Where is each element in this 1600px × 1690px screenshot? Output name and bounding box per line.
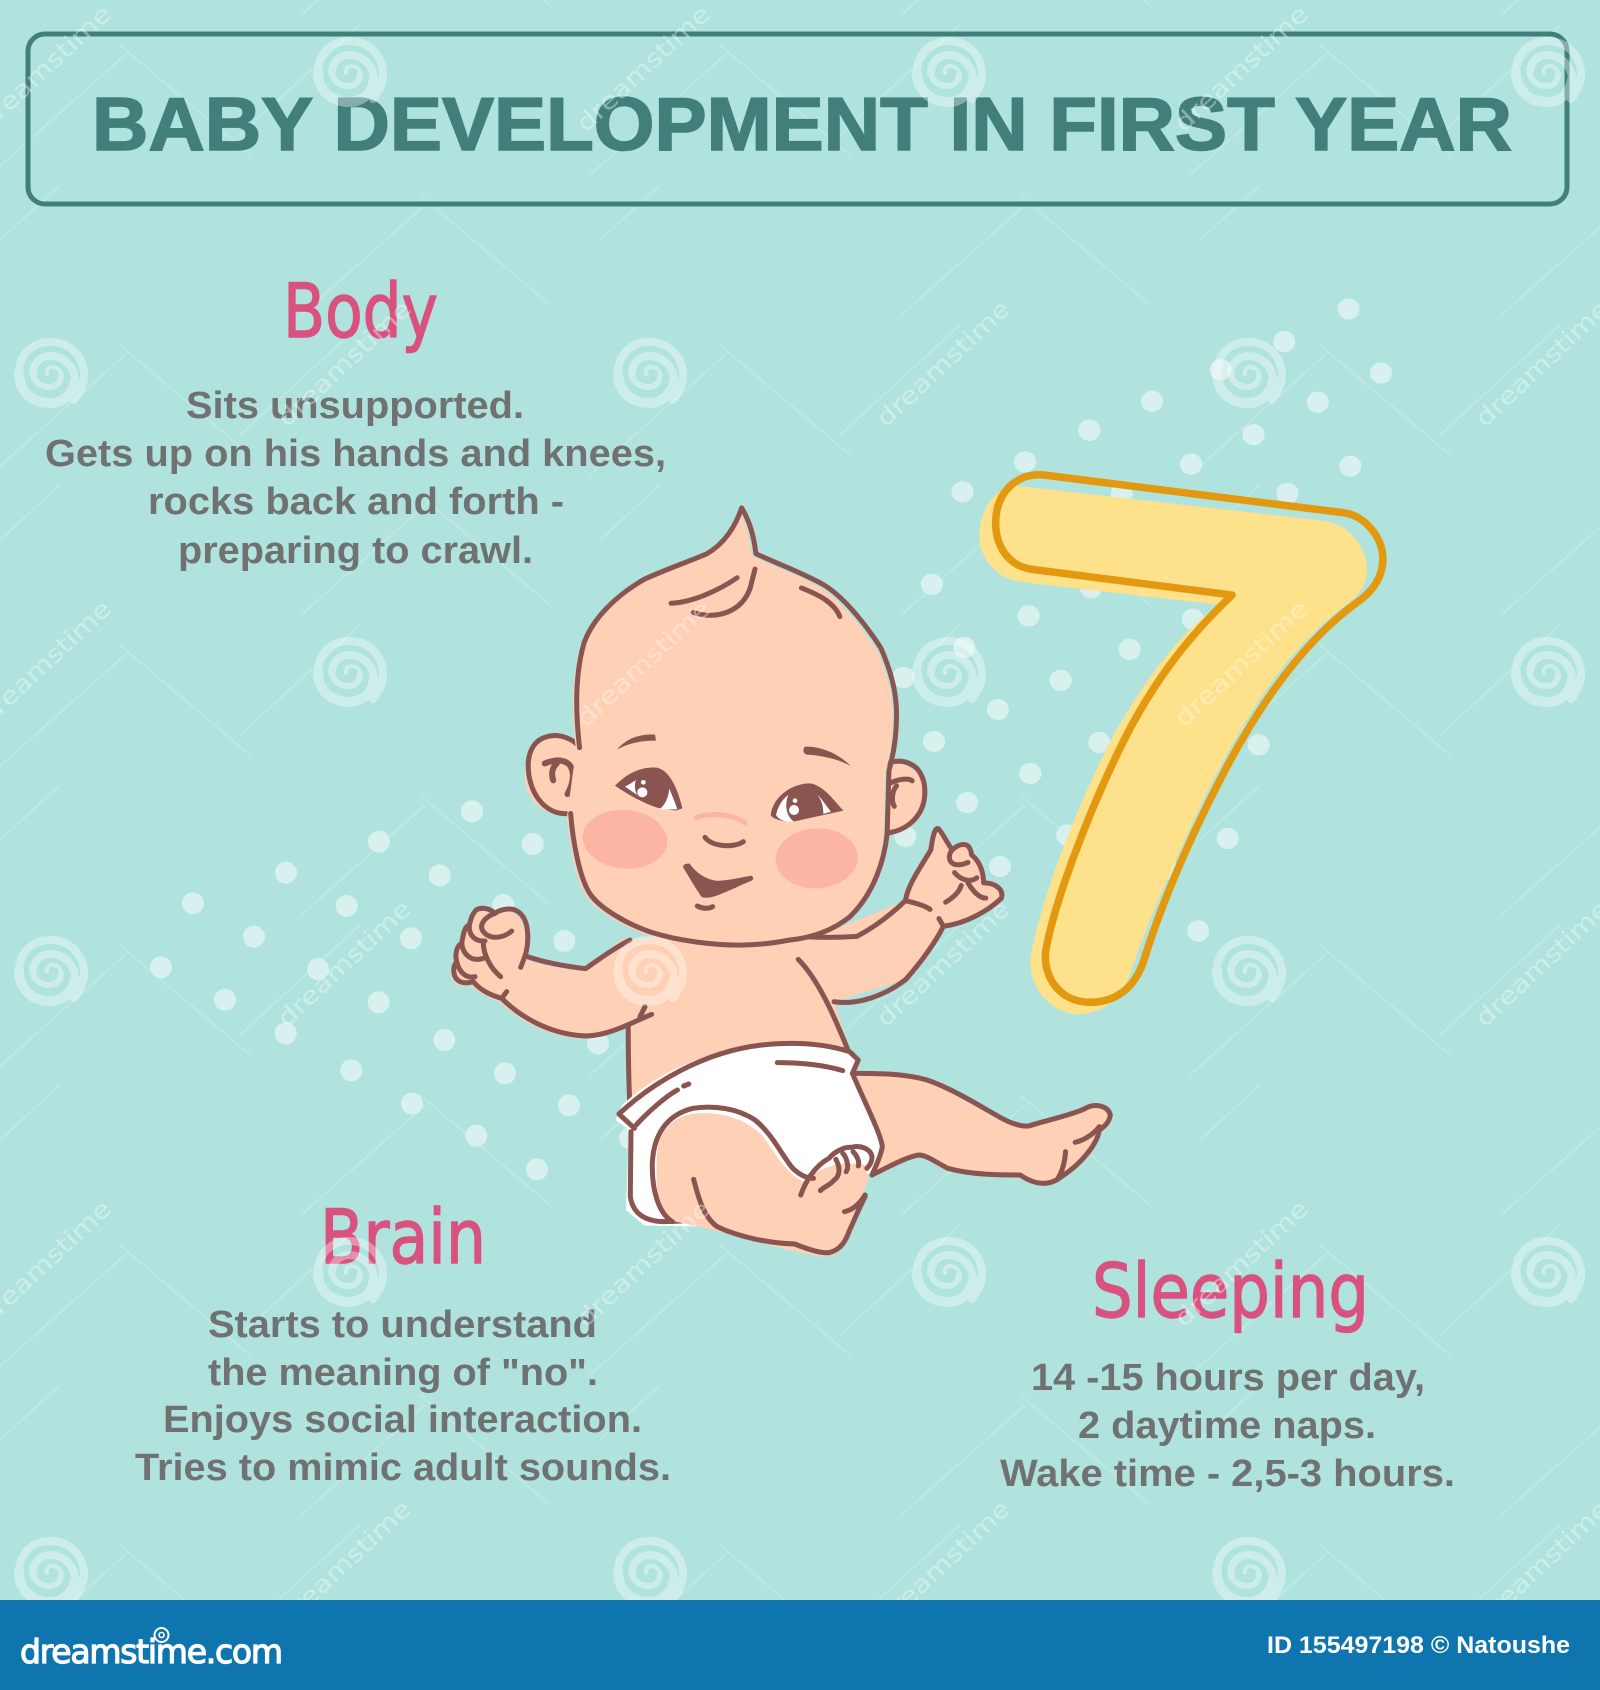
- footer logo spiral: [154, 1628, 168, 1642]
- baby: right leg: [851, 1073, 1110, 1185]
- watermark text: dreamstime: [571, 1195, 716, 1332]
- watermark text: dreamstime: [1169, 0, 1314, 137]
- right eye: [771, 783, 843, 822]
- brain description: the meaning of "no".: [208, 1352, 598, 1394]
- cheeks: [580, 806, 859, 890]
- sleeping description: [1000, 1357, 1455, 1495]
- panel: brain: [135, 1193, 671, 1489]
- heading: sleeping: Sleeping: [1092, 1247, 1369, 1335]
- watermark text: dreamstime: [1470, 295, 1600, 432]
- heading: brain: Brain: [320, 1193, 486, 1281]
- number 7: [979, 475, 1383, 1014]
- watermark text: dreamstime: [1169, 1195, 1314, 1332]
- watermark text: dreamstime: [571, 0, 716, 137]
- sleeping description: 2 daytime naps.: [1078, 1405, 1376, 1447]
- baby illustration: [451, 508, 1110, 1257]
- baby: ears: [525, 736, 925, 833]
- title box: [28, 34, 1567, 204]
- nose: [696, 815, 745, 846]
- watermark text: dreamstime: [1169, 595, 1314, 732]
- body description: rocks back and forth -: [148, 481, 564, 523]
- dots: left cluster: [150, 800, 641, 1180]
- brain description: Tries to mimic adult sounds.: [135, 1447, 671, 1489]
- watermark text: dreamstime: [1470, 1495, 1600, 1632]
- baby: right fist: [905, 828, 1002, 929]
- watermark text: dreamstime: [871, 295, 1016, 432]
- title: BABY DEVELOPMENT IN FIRST YEAR: [92, 82, 1512, 166]
- baby: head: [567, 508, 897, 948]
- brain description: [135, 1304, 671, 1489]
- baby: diaper: [615, 1043, 883, 1227]
- chin: [697, 906, 713, 908]
- brain description: Starts to understand: [208, 1304, 597, 1346]
- image id and author: ID 155497198 © Natoushe: [1267, 1632, 1570, 1659]
- panel: body: [45, 267, 666, 572]
- baby: face: [580, 734, 859, 908]
- watermark text: dreamstime: [571, 595, 716, 732]
- watermark text: dreamstime: [871, 1495, 1016, 1632]
- mouth: [686, 866, 751, 895]
- body description: preparing to crawl.: [178, 530, 533, 572]
- body description: [45, 385, 666, 572]
- eyebrows: [617, 734, 851, 766]
- watermark text: dreamstime: [272, 1495, 417, 1632]
- baby: left arm and fist: [451, 908, 652, 1039]
- sleeping description: Wake time - 2,5-3 hours.: [1000, 1453, 1455, 1495]
- left eye: [615, 768, 682, 811]
- heading: body: Body: [283, 267, 438, 355]
- watermark text: dreamstime: [871, 895, 1016, 1032]
- dots: top right cluster: [893, 298, 1392, 942]
- body description: Sits unsupported.: [186, 385, 524, 427]
- footer bar: [0, 1600, 1600, 1690]
- watermark text: dreamstime: [272, 895, 417, 1032]
- baby: bent leg and foot: [652, 1107, 872, 1257]
- brain description: Enjoys social interaction.: [163, 1399, 642, 1441]
- sleeping description: 14 -15 hours per day,: [1031, 1357, 1425, 1399]
- baby: torso and right arm: [537, 901, 943, 1100]
- watermark text: dreamstime: [272, 295, 417, 432]
- watermark text: dreamstime: [1470, 895, 1600, 1032]
- body description: Gets up on his hands and knees,: [45, 433, 666, 475]
- panel: sleeping: [1000, 1247, 1455, 1495]
- footer logo: dreamstime.com: [20, 1632, 283, 1671]
